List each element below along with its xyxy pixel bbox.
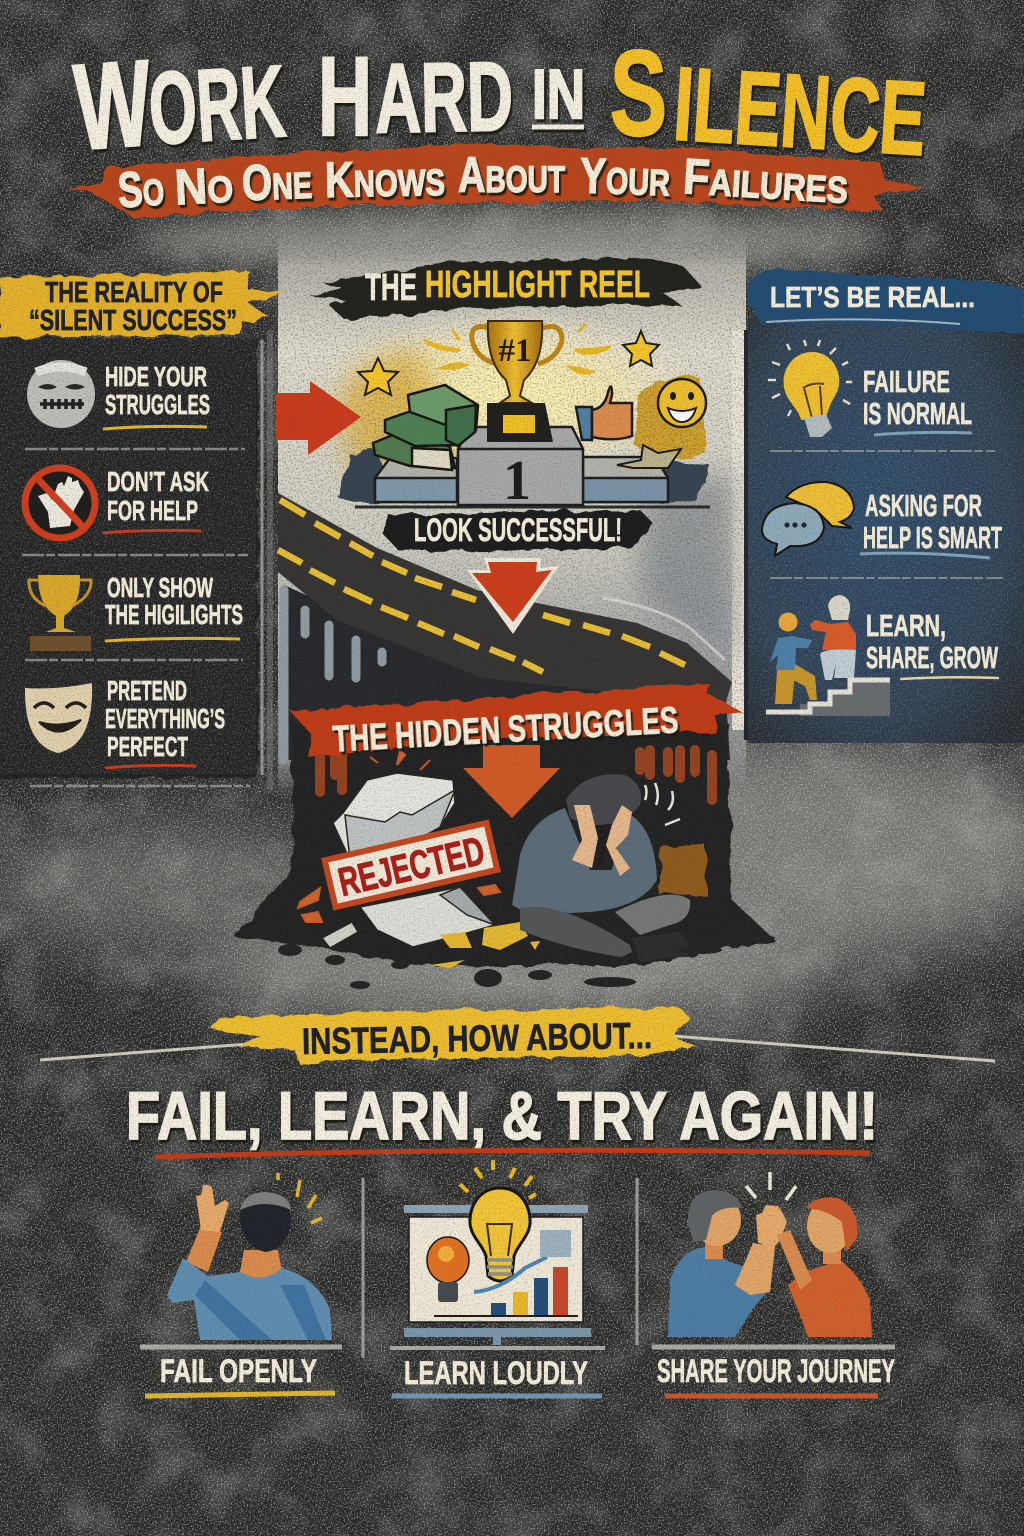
panel: center column backdrop (278, 225, 746, 795)
item: learn share grow: LEARN, (866, 608, 946, 643)
item: only show the highlights (29, 572, 243, 651)
highlight reel banner: THE (365, 267, 417, 309)
look successful banner (384, 510, 652, 552)
instead banner (210, 1008, 696, 1065)
ground splats (234, 931, 775, 989)
item: pretend everything is perfect (25, 675, 225, 768)
item: hide your struggles (27, 360, 210, 429)
icon: high five (668, 1172, 872, 1337)
person with head in hands (512, 774, 690, 962)
icon: trophy: #1 (498, 333, 532, 369)
hidden struggles banner: THE HIDDEN STRUGGLES (332, 699, 679, 760)
title (70, 25, 929, 178)
large lightbulb (460, 1160, 536, 1281)
item: pretend everything is perfect: PRETEND (107, 675, 187, 706)
icon: red down arrow (467, 558, 559, 634)
panel: share your journey (652, 1172, 895, 1396)
item: hide your struggles: STRUGGLES (105, 389, 210, 420)
panel: right let's be real (746, 270, 1024, 743)
icon: down arrow (463, 745, 560, 818)
item: pretend everything is perfect: PERFECT (107, 731, 188, 762)
podium smudges (337, 448, 710, 505)
look successful banner: LOOK SUCCESSFUL! (414, 512, 622, 548)
item: only show the highlights: ONLY SHOW (107, 572, 213, 603)
icon: podium: 1 (503, 450, 531, 512)
title: H (318, 34, 372, 159)
section divider lines (40, 1035, 995, 1061)
panel: learn loudly: LEARN LOUDLY (404, 1355, 588, 1391)
subtitle banner: FAILURES (682, 148, 850, 214)
panel: fail openly (140, 1173, 342, 1396)
subtitle banner: NO (173, 157, 234, 215)
title: ARD (374, 41, 514, 153)
panel: share your journey: SHARE YOUR JOURNEY (657, 1353, 895, 1389)
icon: person waving (167, 1173, 332, 1340)
icon: money stacks (373, 385, 478, 470)
panel: fail openly: FAIL OPENLY (160, 1353, 317, 1389)
item: do not ask for help (25, 466, 209, 538)
subtitle banner: ABOUT (458, 147, 565, 203)
icon: red arrow (276, 381, 361, 455)
item: only show the highlights: THE HIGILIGHTS (105, 599, 243, 630)
icon: podium (375, 427, 668, 512)
icon: smiley (658, 379, 706, 427)
subtitle banner: KNOWS (325, 150, 445, 208)
title: W (70, 34, 156, 175)
icon: presentation board (404, 1160, 591, 1345)
right panel header: LET’S BE REAL... (770, 282, 975, 314)
small lightbulb (427, 1237, 469, 1302)
title: S (610, 25, 667, 161)
item: asking for help is smart (762, 482, 1002, 558)
panel: left reality of silent success (0, 272, 285, 790)
item: failure is normal: FAILURE (863, 364, 950, 399)
item: learn share grow (766, 595, 999, 716)
subtitle banner: SO (116, 159, 166, 218)
item: failure is normal (768, 340, 972, 437)
icon: trophy (424, 321, 610, 442)
highlight reel banner: HIGHLIGHT REEL (425, 264, 650, 306)
item: do not ask for help: FOR HELP (107, 495, 198, 526)
crumpled paper (322, 773, 495, 948)
subtitle banner: ONE (241, 153, 313, 211)
item: pretend everything is perfect: EVERYTHING’S (105, 703, 225, 734)
rejected stamp (321, 819, 501, 911)
item: do not ask for help: DON’T ASK (107, 466, 209, 497)
left panel header (0, 272, 285, 338)
title: ORK (146, 44, 288, 166)
highlight reel banner (310, 258, 702, 320)
rejected stamp: REJECTED (334, 829, 489, 905)
left panel header: “SILENT SUCCESS” (29, 305, 237, 337)
instead banner: INSTEAD, HOW ABOUT... (302, 1015, 652, 1062)
road (278, 493, 732, 760)
panel: hidden struggles scene (235, 722, 775, 968)
left panel header: THE REALITY OF (45, 277, 223, 309)
title: IN (532, 55, 585, 133)
subtitle banner (66, 144, 925, 218)
subtitle banner: YOUR (579, 147, 671, 207)
icon: thumbs up (576, 387, 632, 440)
column dividers (363, 1178, 637, 1358)
right panel header (748, 270, 1024, 334)
item: hide your struggles: HIDE YOUR (105, 361, 207, 392)
icon: stars (358, 331, 659, 395)
panel: learn loudly (390, 1160, 605, 1396)
headline: FAIL, LEARN, & TRY AGAIN! (126, 1078, 878, 1154)
debris shards (298, 750, 540, 968)
icon: envelope of cash (617, 445, 681, 468)
